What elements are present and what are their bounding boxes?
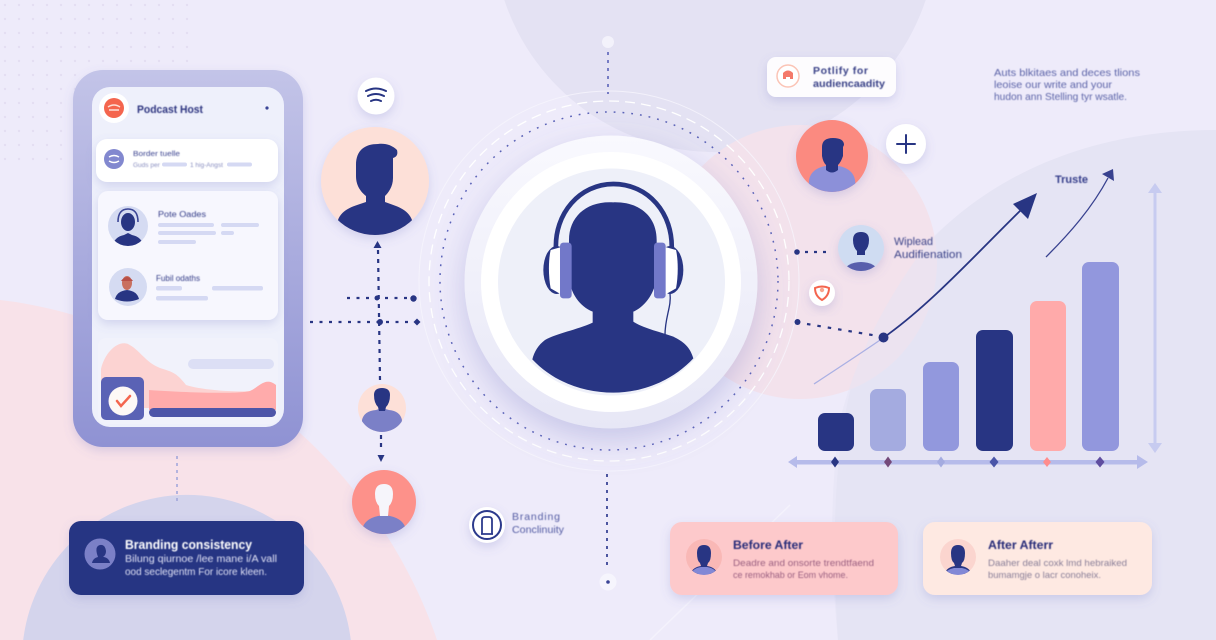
- icon: plus badge: [886, 124, 926, 164]
- icon: person with headphones: [532, 184, 693, 393]
- arrow: small trust arrow: [1046, 169, 1114, 257]
- avatar: [686, 539, 722, 575]
- connector: bottom vertical dotted line: [600, 474, 616, 590]
- icon: shield badge: [809, 280, 835, 306]
- phone card: top white row: Guds per: [133, 162, 161, 169]
- panel: before after: Before After: [733, 538, 803, 552]
- panel: before after: Deadre and onsorte trendtfaend: [733, 558, 874, 569]
- phone card: top white row: [96, 139, 278, 182]
- panel: branding consistency: ood seclegentm For icore kleen.: [125, 567, 267, 578]
- avatar: [940, 539, 976, 575]
- profile two: Fubil odaths: [156, 274, 200, 283]
- avatar: coral person: [352, 470, 416, 538]
- panel: branding consistency: [69, 521, 304, 595]
- panel: branding consistency: Branding consistency: [125, 538, 252, 552]
- panel: after after: [923, 522, 1152, 595]
- phone card: top white row: 1 hig-Angst: [190, 162, 223, 169]
- avatar: blue person with label: Wiplead: [894, 236, 933, 248]
- text block: top right note: leoise our write and your: [994, 79, 1113, 91]
- panel: before after: ce remokhab or Eom vhome.: [733, 570, 848, 581]
- panel: after after: Daaher deal coxk lmd hebraiked: [988, 558, 1127, 569]
- profile two: [109, 268, 263, 306]
- connector: top vertical dotted line: [602, 36, 614, 94]
- connector: chart dotted line: [794, 319, 878, 336]
- avatar: coral person with purple shirt: [796, 120, 868, 196]
- phone card: top white row: Border tuelle: [133, 149, 180, 158]
- connector: audience dotted line: [794, 249, 830, 255]
- profile one: [108, 206, 259, 247]
- avatar: blue person with label: [838, 225, 962, 282]
- panel: phone mockup: [73, 70, 303, 447]
- x axis: [788, 455, 1148, 469]
- panel: after after: After Afterr: [988, 538, 1053, 552]
- profile one: Pote Oades: [158, 210, 206, 219]
- arrow: main growth curve: [814, 193, 1037, 384]
- bars: [818, 262, 1119, 451]
- label: trust: Truste: [1055, 174, 1088, 186]
- panel: after after: bumamgje o lacr conoheix.: [988, 570, 1101, 581]
- avatar: blue person with label: Audifienation: [894, 249, 962, 261]
- avatar: small peach person: [358, 384, 406, 434]
- phone card: profiles: [98, 191, 278, 320]
- y axis: [1148, 183, 1162, 453]
- callout: potlify for audience: [767, 57, 896, 97]
- callout: potlify for audience: audiencaadity: [813, 78, 885, 90]
- text block: top right note: [994, 67, 1140, 103]
- connector: faint line below phone: [176, 456, 178, 502]
- avatar: large peach person: [321, 127, 429, 240]
- central podcast host disc: [419, 91, 799, 471]
- callout: branding continuity: Branding: [512, 511, 560, 523]
- text block: top right note: hudon ann Stelling tyr wsatle.: [994, 91, 1127, 103]
- callout: potlify for audience: Potlify for: [813, 65, 868, 77]
- icon: wifi badge: [358, 78, 394, 114]
- connector: vertical dotted line with arrows: [374, 241, 384, 462]
- callout: branding continuity: [469, 507, 565, 543]
- icon: person badge: [84, 538, 116, 570]
- phone header: podcast host: Podcast Host: [137, 104, 203, 116]
- text block: top right note: Auts blkitaes and deces tlions: [994, 67, 1140, 79]
- phone header: podcast host: [99, 93, 269, 123]
- phone card: chart panel: [98, 338, 278, 424]
- check tile: [101, 377, 144, 420]
- bar chart: [788, 183, 1162, 469]
- callout: branding continuity: Conclinuity: [512, 524, 565, 536]
- panel: branding consistency: Bilung qiurnoe /lee mane i/A vall: [125, 554, 277, 565]
- connector: horizontal dotted lines: [310, 295, 420, 326]
- panel: before after: [670, 522, 898, 595]
- orbit rings: [419, 91, 799, 471]
